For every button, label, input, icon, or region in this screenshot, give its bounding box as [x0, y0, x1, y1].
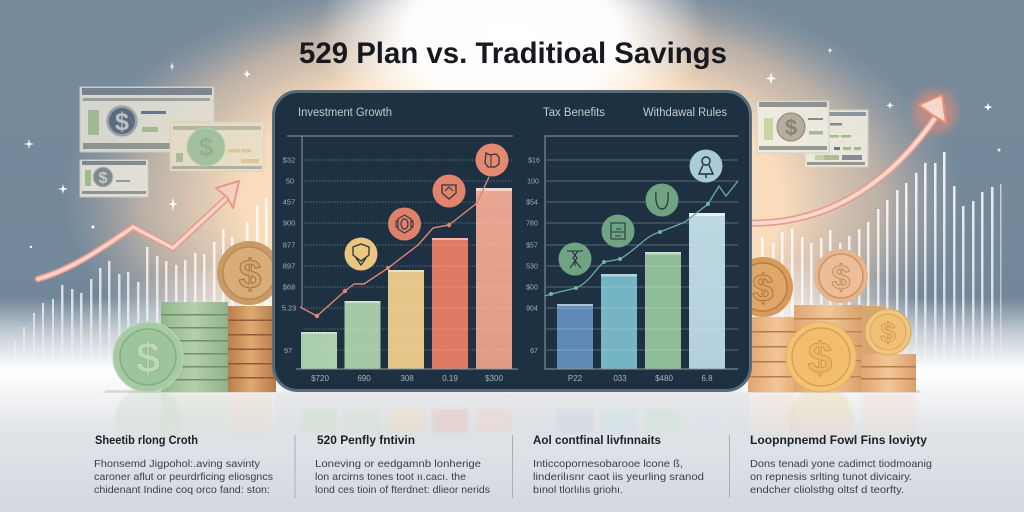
copper coin [217, 241, 281, 305]
column 4 text: on repnesis srlting tunot divicairy. [750, 471, 912, 483]
right arrow [745, 95, 946, 223]
column 4 text: Loopnpnemd Fowl Fins loviyty [750, 435, 928, 447]
y axis labels: $16 [528, 158, 540, 164]
x axis labels: 033 [613, 374, 627, 383]
green coin: $ [136, 334, 160, 383]
icon: scale badge [558, 242, 592, 276]
column 3 text [533, 435, 704, 496]
icon: person badge [690, 150, 722, 182]
y axis labels: $32 [283, 156, 295, 164]
y axis labels: $00 [526, 284, 538, 292]
right arrow glow [913, 90, 957, 134]
column 4 text [750, 435, 932, 496]
column 2 text: 520 Penfly fntivin [317, 435, 415, 447]
column 2 text: lond ces tioin of fterdnet: dlieor nerids [315, 484, 490, 496]
banknote overlapping: $ [199, 132, 214, 162]
y axis labels: 900 [283, 218, 295, 228]
left coins [113, 241, 281, 392]
column 3 text: linderilısnr caot iis yeurling sranod [533, 471, 704, 483]
y axis labels: 97 [284, 346, 292, 355]
column 2 text: Loneving or eedgamnb lonherige [315, 458, 481, 470]
y axis labels [526, 158, 540, 355]
y axis labels: 877 [283, 240, 295, 250]
x axis labels: 308 [400, 374, 414, 383]
panel bar reflections [301, 409, 725, 433]
icon: u-shape badge [646, 184, 678, 216]
copper coin: $ [239, 251, 262, 297]
x axis labels: P22 [568, 374, 583, 383]
banknote front: $ [785, 115, 797, 140]
stack left [748, 317, 806, 392]
green stack [161, 302, 228, 392]
y axis labels: 780 [526, 220, 538, 228]
chart: investment growth [282, 136, 518, 383]
y axis labels: $68 [283, 282, 295, 292]
floor [0, 370, 1024, 512]
column 1 text: Fhonsemd Jigpohol:.aving savinty [94, 458, 261, 470]
coin gold big: $ [808, 334, 832, 383]
bars [301, 188, 512, 369]
banknote large [80, 87, 214, 152]
coin gold big [786, 322, 856, 392]
y axis labels [282, 156, 296, 355]
x axis labels: 0.19 [442, 374, 458, 383]
panel headings: Withdawal Rules [643, 107, 727, 119]
panel headings: Investment Growth [298, 107, 392, 119]
banknote small [80, 160, 148, 197]
x axis labels: 6.8 [701, 374, 713, 383]
icon: document badge [432, 174, 466, 208]
y axis labels: 100 [527, 178, 539, 186]
left banknotes [80, 87, 264, 197]
right background bar chart [761, 152, 1002, 375]
stack right [861, 354, 916, 392]
column 1 text [94, 435, 273, 496]
left background bar chart [14, 198, 268, 375]
banknote large: $ [115, 108, 129, 136]
x axis labels [311, 374, 503, 383]
panel headings [298, 107, 727, 119]
stack middle [794, 305, 886, 392]
y axis labels: 897 [283, 262, 295, 270]
y axis labels: 50 [286, 176, 294, 186]
y axis labels: 67 [530, 348, 538, 355]
bars [557, 213, 725, 369]
coin top [814, 249, 868, 303]
icon: shield badge [344, 238, 378, 270]
green coin [113, 322, 183, 392]
coin top: $ [832, 259, 851, 297]
coin left: $ [752, 268, 774, 310]
column 4 text: endcher cliolsthg oltsf d teorfty. [750, 484, 904, 496]
column 1 text: Sheetib rlong Croth [95, 435, 198, 447]
icon: coin badge [388, 208, 421, 240]
y axis labels: $57 [526, 242, 538, 250]
right banknotes [757, 101, 868, 167]
y axis labels: 457 [283, 198, 295, 206]
coin gold small [865, 309, 911, 355]
panel headings: Tax Benefits [543, 107, 605, 119]
column 2 text: lon arcirns tones toot ıı.cacı. the [315, 471, 466, 483]
bottom column dividers [295, 435, 730, 498]
column 3 text: Aol contfinal livfınnaits [533, 435, 661, 447]
x axis labels: 690 [357, 374, 371, 383]
title: 529 Plan vs. Traditioal Savings [299, 37, 727, 70]
icon: piggy badge [476, 144, 508, 176]
y axis labels: 530 [526, 264, 538, 270]
floor reflections [116, 390, 916, 435]
panel: dashboard [274, 92, 750, 390]
x axis labels [568, 374, 713, 383]
y axis labels: 5.23 [282, 304, 296, 312]
column 1 text: chidenant Indine coq orco fand: ston: [94, 484, 270, 496]
x axis labels: $300 [485, 374, 503, 383]
banknote back [805, 110, 868, 167]
chart: tax benefits and withdrawal rules [526, 136, 738, 383]
column 3 text: bınol tlorlılıs griohı. [533, 484, 623, 496]
x axis labels: $480 [655, 374, 673, 383]
column 2 text [315, 435, 490, 496]
y axis labels: 904 [526, 306, 538, 312]
icon: safe badge [602, 214, 634, 248]
axes and grid [545, 136, 738, 369]
coin ground shadows [105, 390, 920, 392]
left arrow [38, 181, 239, 279]
coin gold small: $ [880, 317, 896, 348]
trend line [545, 181, 738, 296]
trend line [300, 177, 489, 318]
banknote small: $ [99, 170, 108, 187]
column 3 text: Inticcopornesobarooe lcone ß, [533, 458, 683, 470]
column 1 text: caroner aflut or peurdrficing eliosgncs [94, 471, 273, 483]
copper stack [226, 306, 276, 392]
axes and grid [287, 136, 518, 369]
right coins [733, 249, 916, 392]
coin left [733, 257, 793, 317]
bottom fade to white [0, 298, 1024, 370]
column 4 text: Dons tenadi yone cadimct tiodmoanig [750, 458, 932, 470]
x axis labels: $720 [311, 374, 329, 383]
banknote overlapping [170, 122, 264, 171]
y axis labels: $54 [526, 200, 538, 206]
sparkles [24, 47, 1000, 248]
lower center glow [0, 235, 1024, 400]
